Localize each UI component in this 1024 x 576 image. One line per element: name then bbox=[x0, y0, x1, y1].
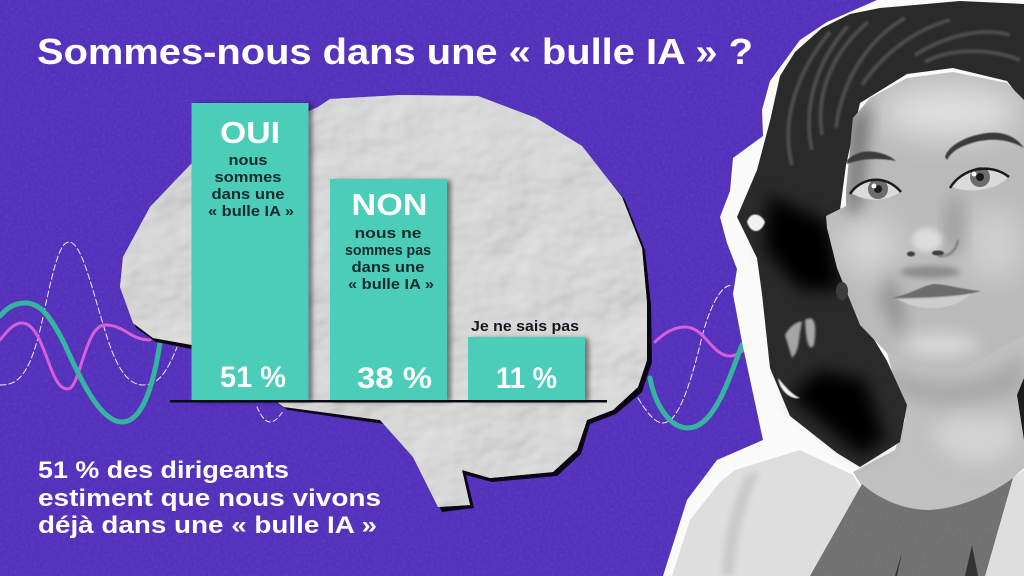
bar: NON 38 %: nous ne bbox=[354, 225, 422, 242]
bar: NON 38 %: sommes pas bbox=[345, 242, 431, 259]
summary text: 51 % des dirigeants bbox=[38, 457, 289, 484]
bar: OUI 51 %: nous bbox=[228, 152, 268, 169]
summary text: estiment que nous vivons bbox=[38, 485, 381, 512]
face bbox=[826, 72, 1024, 357]
portrait of woman bbox=[663, 0, 1024, 576]
right sound waves bbox=[638, 285, 745, 428]
bar: OUI 51 %: sommes bbox=[214, 169, 282, 186]
bar: OUI 51 % bbox=[192, 103, 308, 401]
hair highlights bbox=[788, 18, 1020, 165]
white cut-out outline bbox=[663, 0, 1024, 576]
bar: Je ne sais pas 11 %: Je ne sais pas bbox=[471, 318, 579, 335]
nose bbox=[907, 195, 964, 256]
bar: NON 38 % bbox=[330, 179, 447, 401]
left sound waves bbox=[0, 242, 284, 422]
bar: NON 38 %: 38 % bbox=[357, 362, 432, 395]
bar: NON 38 %: « bulle IA » bbox=[348, 276, 434, 293]
lips bbox=[892, 284, 981, 308]
bar: OUI 51 %: dans une bbox=[212, 186, 284, 203]
dark hair curls bbox=[765, 195, 885, 455]
bar: OUI 51 %: 51 % bbox=[220, 361, 286, 394]
neck bbox=[853, 330, 1024, 510]
bar: OUI 51 %: OUI bbox=[220, 115, 280, 150]
bar: NON 38 %: NON bbox=[352, 187, 428, 222]
hair bbox=[737, 1, 1024, 467]
bar: Je ne sais pas 11 % bbox=[468, 318, 585, 401]
brain paper bbox=[120, 95, 647, 507]
eyes bbox=[850, 167, 1009, 200]
eyebrows bbox=[847, 133, 1024, 164]
brain paper cut-out bbox=[120, 95, 652, 512]
summary text bbox=[38, 457, 381, 539]
brain shadow bbox=[124, 99, 652, 512]
chart baseline bbox=[170, 400, 607, 402]
hair patch right of neck bbox=[1017, 378, 1024, 440]
jacket bbox=[672, 450, 1024, 576]
dress bbox=[810, 478, 1013, 576]
summary text: déjà dans une « bulle IA » bbox=[38, 512, 377, 539]
bar: Je ne sais pas 11 %: 11 % bbox=[496, 362, 557, 395]
bar: OUI 51 %: « bulle IA » bbox=[208, 203, 294, 220]
earring bbox=[836, 282, 848, 300]
hair gaps bbox=[747, 214, 800, 398]
bar: NON 38 %: dans une bbox=[352, 259, 424, 276]
title: Sommes-nous dans une « bulle IA » ? bbox=[37, 31, 753, 72]
